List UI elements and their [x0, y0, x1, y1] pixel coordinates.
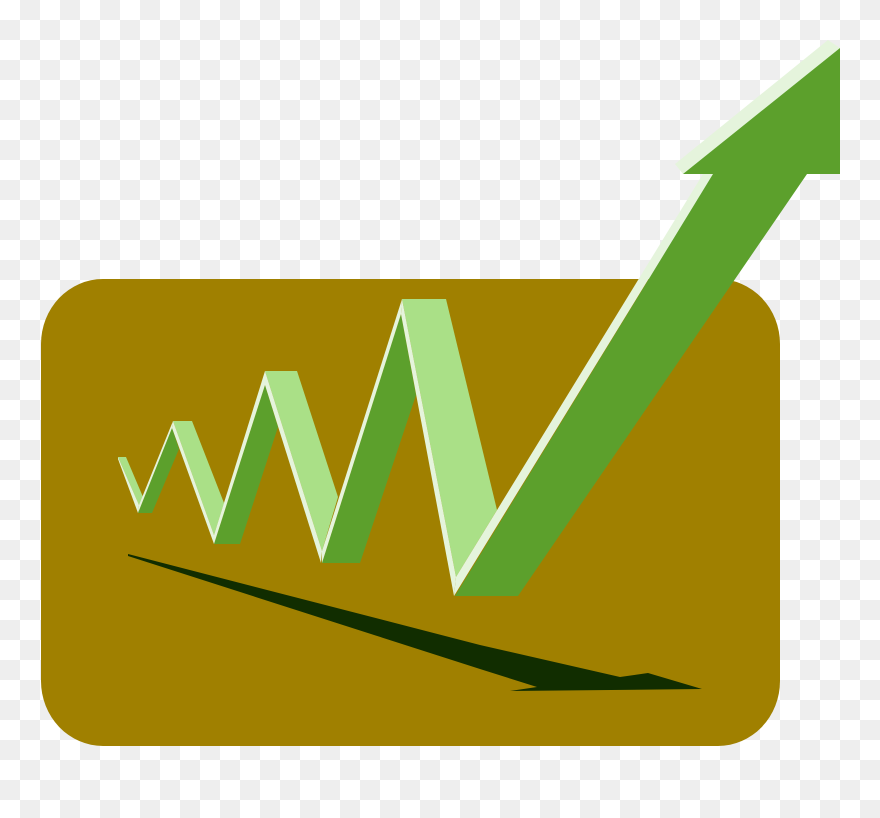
shadow: dark arrow shadow: [128, 554, 702, 691]
arrowhead and main dark shaft: [455, 48, 840, 596]
light descending ribbon segments: [118, 299, 497, 577]
arrow: zigzag rising arrow: [118, 40, 840, 596]
panel: rounded brown background: [41, 279, 780, 746]
pale ribbon highlights: [118, 40, 840, 596]
dark ascending ribbon segments: [138, 314, 416, 563]
